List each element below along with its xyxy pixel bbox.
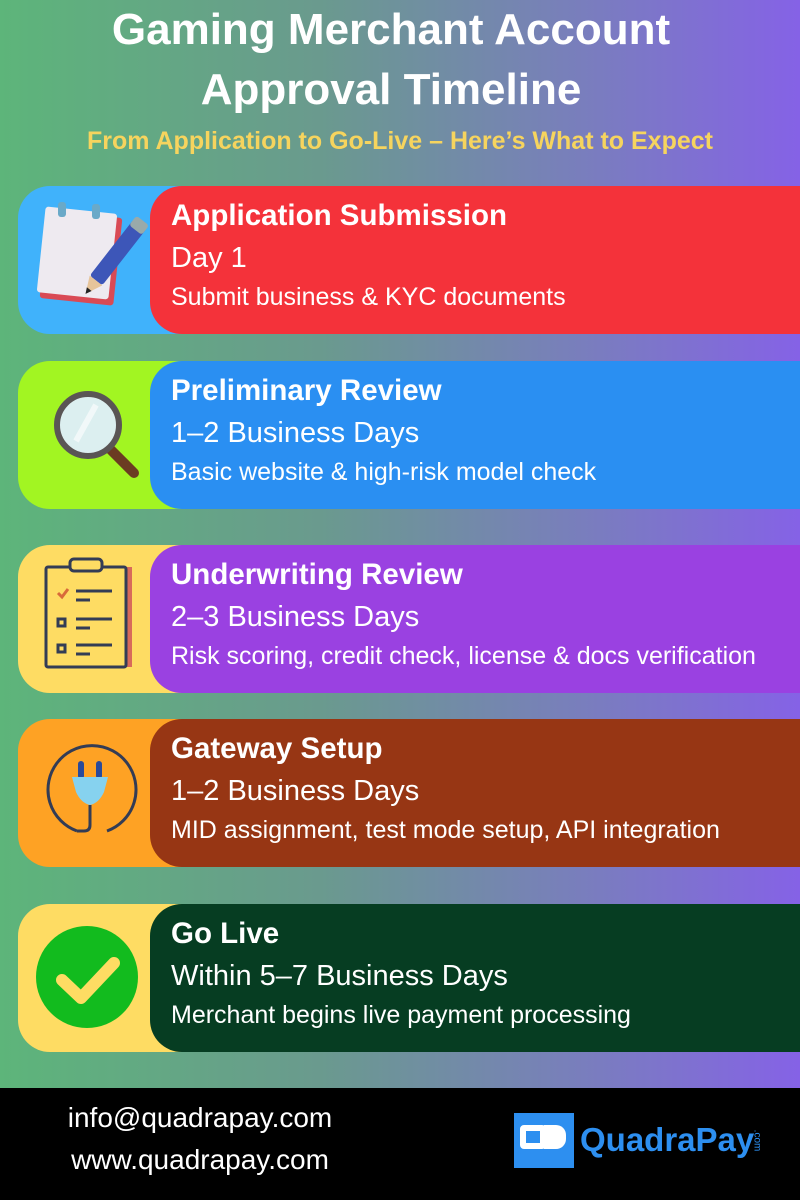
contact text: www.quadrapay.com [71,1144,329,1175]
inner: go live: Within 5–7 Business Days [171,960,508,992]
icon: clipboard [44,558,132,668]
footer [0,1088,800,1200]
inner: application submission: Day 1 [171,242,247,274]
icon: check [36,926,138,1028]
icon: magnifier [54,391,139,478]
panel: application submission [18,186,800,334]
inner: go live: Merchant begins live payment processing [171,1001,631,1029]
logo: .com [751,1130,762,1151]
inner: go live: Go Live [171,917,279,950]
inner: preliminary review: 1–2 Business Days [171,417,419,449]
inner: gateway setup: MID assignment, test mode setup, API integration [171,816,720,844]
inner: underwriting review: Risk scoring, credit check, license & docs verification [171,642,756,670]
inner: application submission [150,186,800,334]
inner: preliminary review: Basic website & high-risk model check [171,458,596,486]
logo [514,1113,762,1168]
panel: go live [18,904,800,1052]
inner: gateway setup: 1–2 Business Days [171,775,419,807]
subtitle: From Application to Go-Live – Here’s What to Expect [87,127,713,155]
title: Approval Timeline [201,65,581,114]
icon: plug [46,744,138,832]
title: Gaming Merchant Account [112,5,670,54]
contact text [68,1102,332,1175]
inner: preliminary review [150,361,800,509]
inner: go live [150,904,800,1052]
inner: preliminary review: Preliminary Review [171,374,442,407]
inner: application submission: Submit business & KYC documents [171,283,566,311]
inner: gateway setup: Gateway Setup [171,732,382,765]
icon: notepad [37,202,148,306]
inner: gateway setup [150,719,800,867]
inner: underwriting review: 2–3 Business Days [171,601,419,633]
title [112,5,670,114]
panel: gateway setup [18,719,800,867]
contact text: info@quadrapay.com [68,1102,332,1133]
inner: underwriting review [150,545,800,693]
inner: underwriting review: Underwriting Review [171,558,463,591]
logo: QuadraPay [580,1121,754,1158]
panel: underwriting review [18,545,800,693]
inner: application submission: Application Submission [171,199,507,232]
panel: preliminary review [18,361,800,509]
